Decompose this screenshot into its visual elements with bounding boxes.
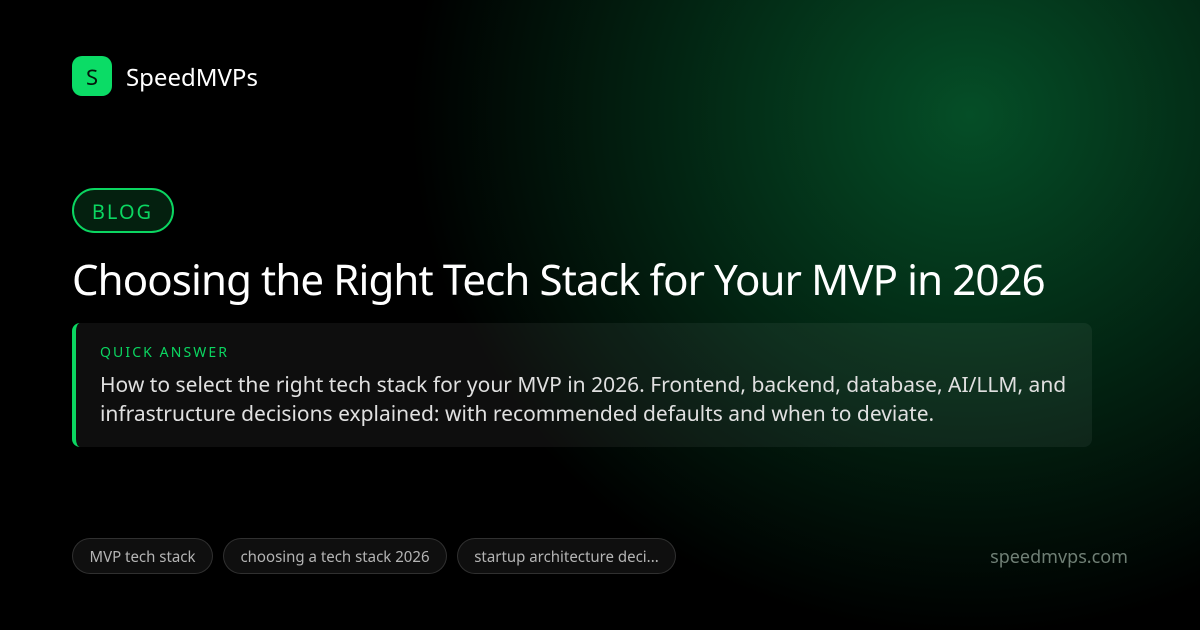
logo <box>72 56 258 96</box>
category badge <box>72 188 174 233</box>
icon: logo mark: S <box>86 62 98 92</box>
tag: MVP tech stack <box>72 538 213 574</box>
brand name: SpeedMVPs <box>126 61 258 94</box>
category badge: BLOG <box>92 198 153 225</box>
quick answer text: How to select the right tech stack for your MVP in 2026. Frontend, backend, database, AI/LLM, and <box>100 371 1066 399</box>
site url: speedmvps.com <box>990 545 1128 569</box>
tag: startup architecture: startup architecture deci... <box>474 547 659 567</box>
quick answer text: infrastructure decisions explained: with recommended defaults and when to deviate. <box>100 400 934 428</box>
quick answer text <box>100 371 1066 428</box>
panel: quick answer <box>72 323 1092 447</box>
tag: startup architecture <box>457 538 676 574</box>
quick answer label: QUICK ANSWER <box>100 343 229 362</box>
title: Choosing the Right Tech Stack for Your MVP in 2026 <box>72 251 1045 308</box>
tag: choosing a tech stack 2026: choosing a tech stack 2026 <box>240 547 430 567</box>
icon: logo mark <box>72 56 112 96</box>
tag: choosing a tech stack 2026 <box>223 538 447 574</box>
tag: MVP tech stack: MVP tech stack <box>89 547 196 567</box>
